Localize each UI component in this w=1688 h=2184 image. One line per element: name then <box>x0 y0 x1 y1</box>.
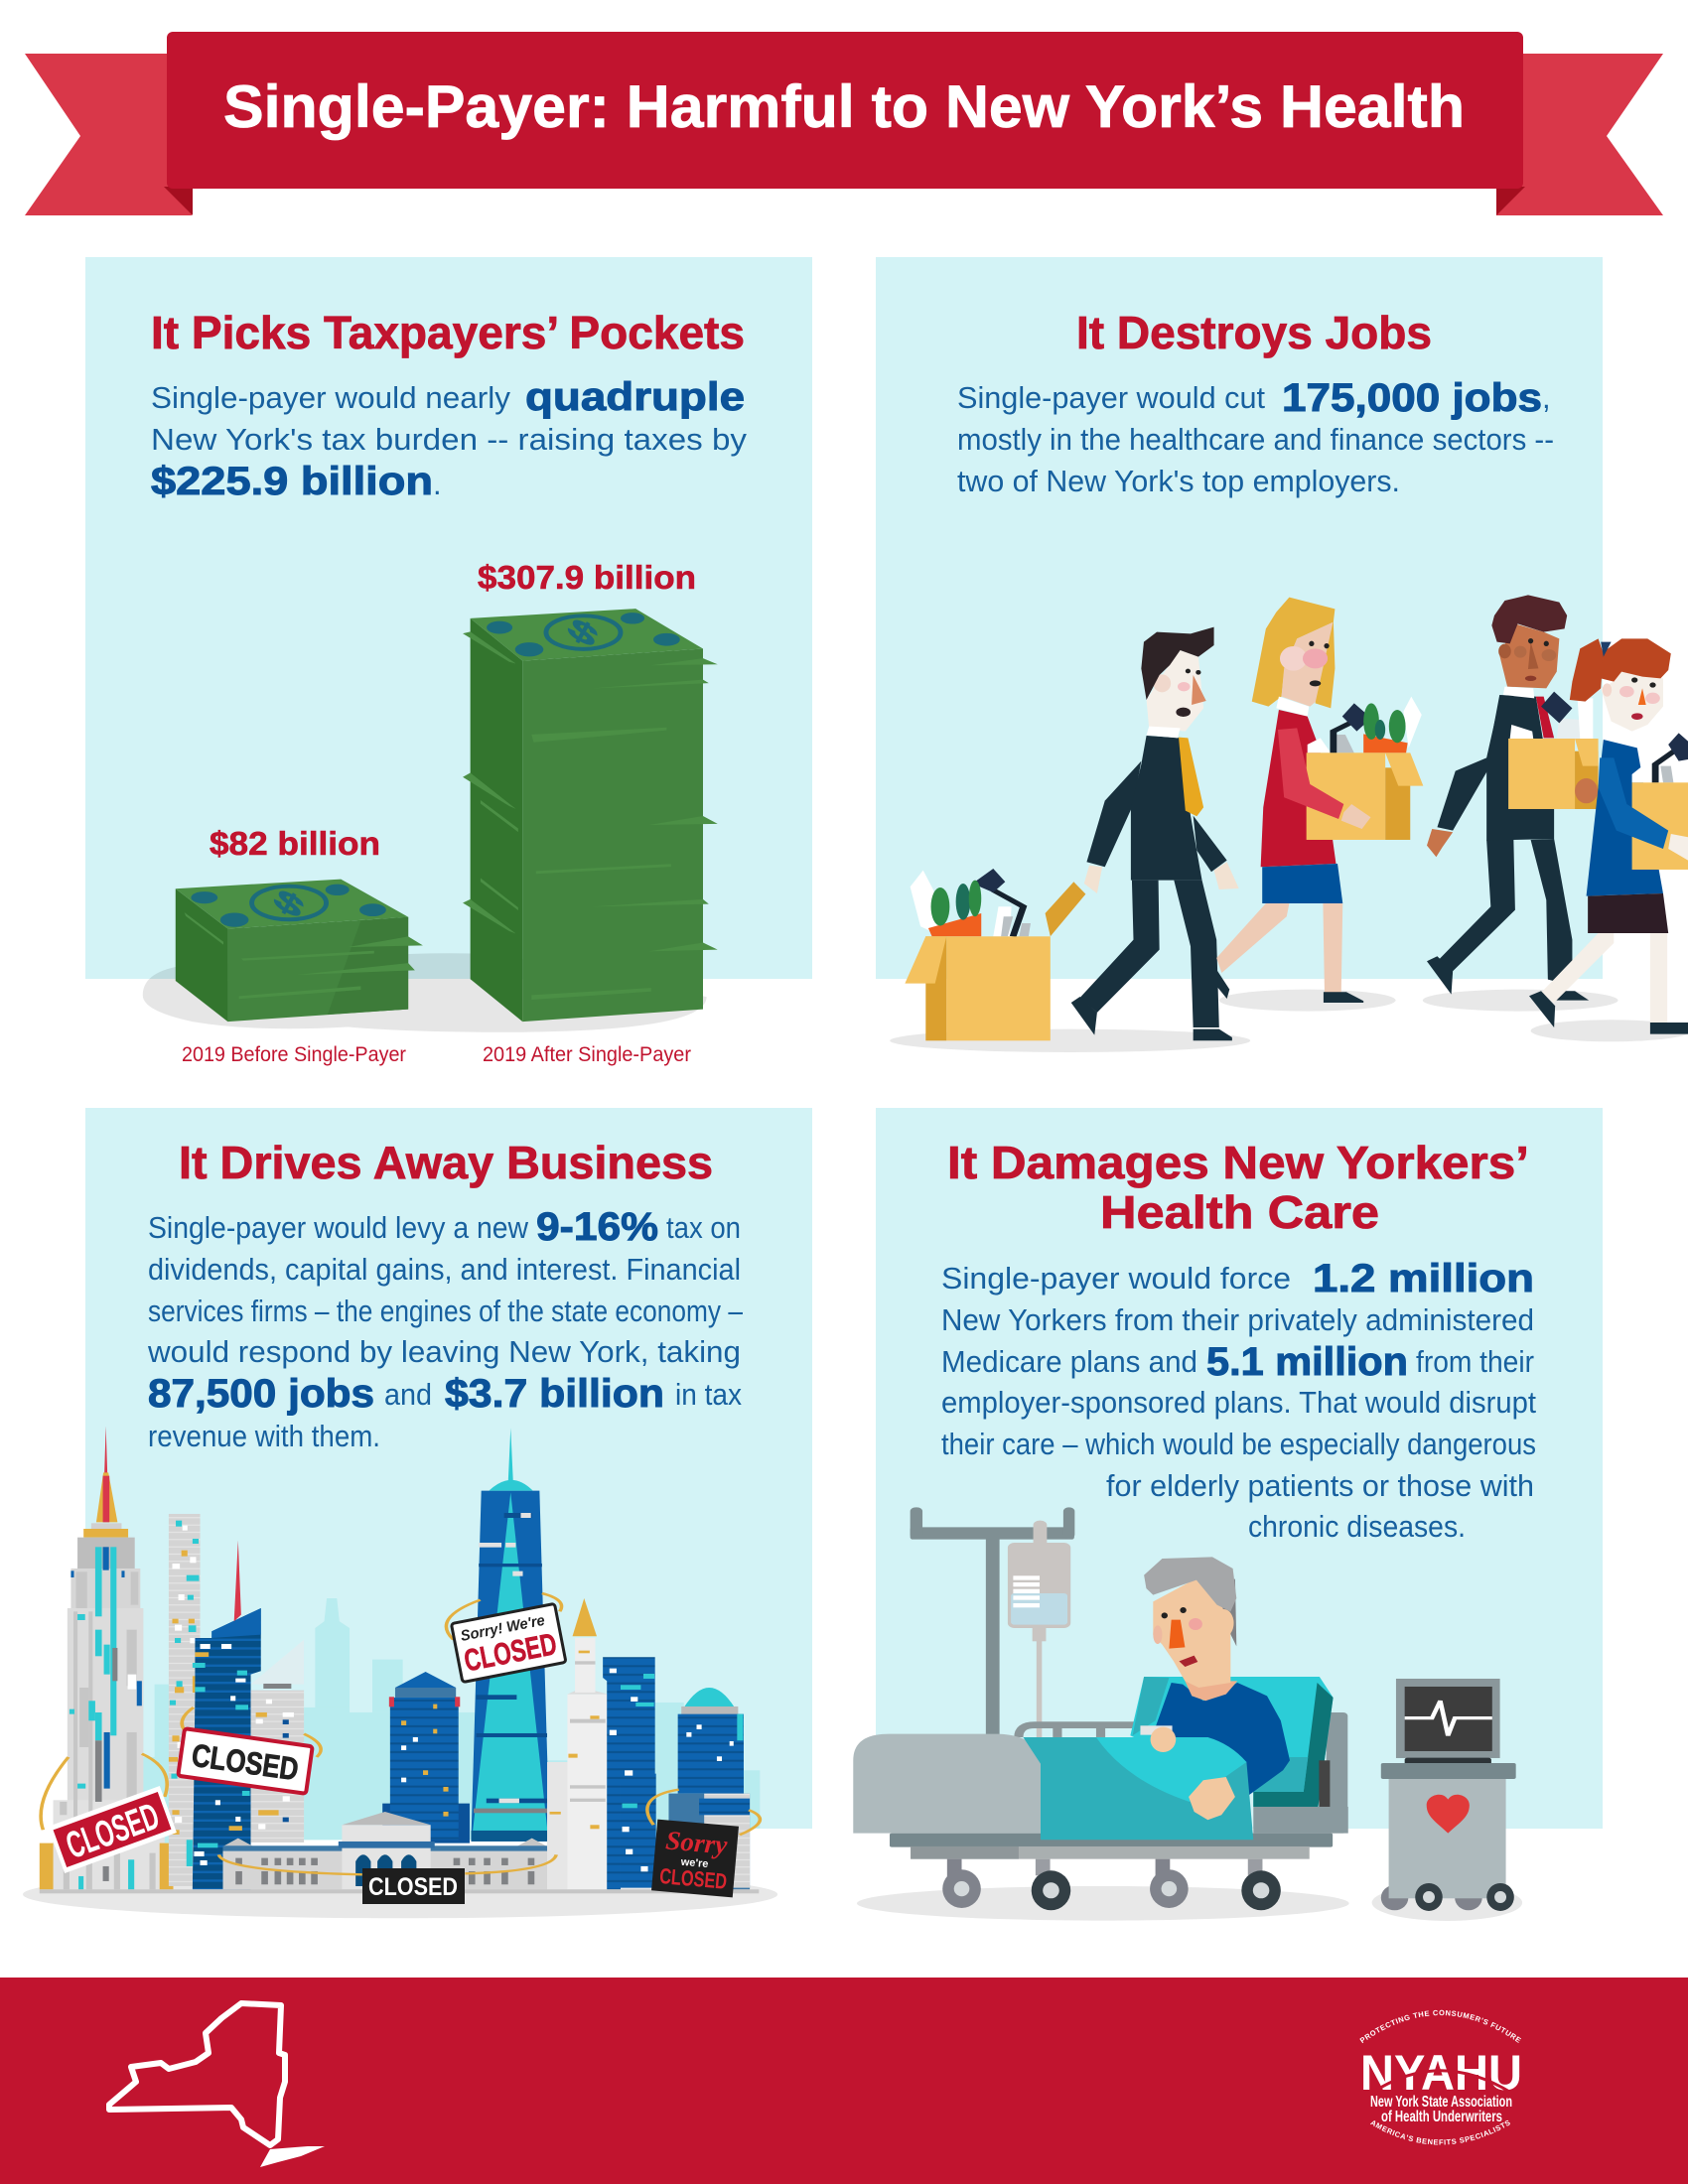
empire state building <box>40 1427 173 1889</box>
body text: chronic diseases. <box>1248 1509 1466 1544</box>
panel background <box>876 1108 1603 1829</box>
carried box <box>1508 692 1599 809</box>
heading: It Drives Away Business <box>179 1137 713 1188</box>
heading: It Destroys Jobs <box>1076 307 1432 358</box>
body text <box>147 1205 744 1453</box>
dark blue tower <box>193 1541 261 1889</box>
backrest pillow <box>1130 1677 1334 1808</box>
woman in blue <box>1529 638 1688 1034</box>
library building <box>222 1812 547 1889</box>
body text: New Yorkers from their privately administered <box>941 1302 1534 1337</box>
banner main ribbon <box>167 32 1523 189</box>
body text: Single-payer would cut <box>957 380 1265 415</box>
body text: employer-sponsored plans. That would disrupt <box>941 1385 1536 1420</box>
box on floor <box>905 869 1085 1040</box>
sign: white closed red border <box>178 1728 313 1794</box>
ground <box>23 1870 777 1918</box>
blue tower center <box>382 1672 470 1843</box>
sign: sorry black: we're <box>679 1856 709 1870</box>
body text: 87,500 jobs <box>148 1372 374 1416</box>
sign: red closed <box>48 1786 177 1873</box>
illustration: city skyline <box>23 1427 777 1918</box>
body text <box>941 1257 1536 1544</box>
NYAHU logo: NYAHU <box>1360 2045 1522 2101</box>
body text: . <box>433 467 442 501</box>
stack shadow <box>143 953 707 1032</box>
sign ropes <box>41 1593 760 1874</box>
sign: sorry black <box>651 1820 739 1897</box>
heading <box>947 1137 1529 1238</box>
sign: black closed <box>362 1868 465 1904</box>
dollar sign tall: $ <box>562 613 604 653</box>
NYAHU logo: New York State Association <box>1370 2094 1512 2111</box>
body text: 9-16% <box>536 1205 658 1249</box>
body text: from their <box>1416 1344 1534 1379</box>
sign: sorry black: Sorry <box>664 1825 730 1860</box>
background skyline <box>142 1598 760 1843</box>
heading: Health Care <box>1100 1186 1379 1238</box>
body text: in tax <box>675 1377 742 1412</box>
body text: $225.9 billion <box>151 460 433 503</box>
patient <box>1144 1557 1290 1802</box>
carried box <box>1307 697 1423 840</box>
body text: services firms – the engines of the state economy – <box>148 1294 744 1328</box>
grey tower <box>169 1514 201 1886</box>
body text: Medicare plans and <box>941 1344 1197 1379</box>
hands <box>1140 1725 1235 1820</box>
panel background <box>85 1108 812 1829</box>
title: Single-Payer: Harmful to New York’s Health <box>223 73 1465 140</box>
body text: would respond by leaving New York, taking <box>147 1334 741 1369</box>
body text: New York's tax burden -- raising taxes by <box>151 422 748 457</box>
footer band <box>0 1978 1688 2184</box>
value label 307.9: $307.9 billion <box>478 559 696 596</box>
NYAHU logo: of Health Underwriters <box>1381 2109 1502 2125</box>
body text: , <box>1542 380 1551 415</box>
panel: jobs <box>876 257 1688 1052</box>
sign: black closed: CLOSED <box>368 1873 458 1901</box>
panel: taxes <box>85 257 812 1066</box>
body text: Single-payer would force <box>941 1261 1291 1296</box>
body text: quadruple <box>525 375 745 419</box>
illustration: laid-off workers <box>890 595 1688 1052</box>
dollar sign small: $ <box>268 884 310 924</box>
sign: red closed: CLOSED <box>61 1796 165 1867</box>
floor shadows <box>857 1884 1522 1921</box>
woman in red <box>1216 598 1423 1003</box>
domed tower right <box>668 1688 750 1889</box>
bar chart: money stacks <box>143 559 718 1066</box>
iv pole <box>911 1507 1074 1737</box>
body text: for elderly patients or those with <box>1106 1468 1534 1503</box>
sign: sorry black: CLOSED <box>658 1863 728 1894</box>
body text: two of New York's top employers. <box>957 464 1400 498</box>
bed rail <box>1019 1725 1135 1737</box>
banner left tail <box>25 54 192 215</box>
axis label after: 2019 After Single-Payer <box>483 1043 691 1066</box>
panel: health care <box>853 1108 1603 1921</box>
body text <box>957 376 1554 498</box>
blue tower right <box>603 1657 656 1889</box>
body text: 175,000 jobs <box>1282 376 1542 420</box>
bed wheels <box>942 1859 1281 1910</box>
panel background <box>85 257 812 979</box>
iv bag <box>1008 1521 1070 1737</box>
blanket <box>1023 1737 1253 1840</box>
axis label before: 2019 Before Single-Payer <box>182 1043 406 1066</box>
man with yellow tie <box>1071 627 1239 1040</box>
body text: 1.2 million <box>1313 1257 1534 1300</box>
sign: white closed red border: CLOSED <box>190 1737 301 1787</box>
banner right tail <box>1496 54 1663 215</box>
tall money stack <box>463 609 718 1022</box>
panel: business <box>23 1108 812 1918</box>
ground line <box>40 1889 759 1893</box>
body text: mostly in the healthcare and finance sectors -- <box>957 422 1554 457</box>
title banner <box>25 32 1663 215</box>
body text: Single-payer would nearly <box>151 380 511 415</box>
freedom tower <box>471 1428 550 1842</box>
body text: revenue with them. <box>148 1419 380 1453</box>
body text: tax on <box>666 1210 741 1245</box>
heart monitor <box>1396 1679 1500 1766</box>
body text: their care – which would be especially dangerous <box>941 1427 1536 1461</box>
sign: sorry we're closed: Sorry! We're <box>459 1612 546 1645</box>
floor shadows <box>890 990 1688 1052</box>
ornate white tower <box>547 1598 621 1889</box>
new york state outline <box>109 2003 325 2167</box>
sign: sorry we're closed: CLOSED <box>462 1626 559 1678</box>
man with red tie <box>1427 595 1599 1001</box>
NYAHU logo: PROTECTING THE CONSUMER'S FUTURE <box>1359 2009 1521 2043</box>
body text: and <box>384 1377 432 1412</box>
heading: It Picks Taxpayers’ Pockets <box>151 307 745 358</box>
value label 82: $82 billion <box>210 825 380 862</box>
footboard <box>853 1734 1041 1834</box>
carried box <box>1632 733 1688 870</box>
NYAHU logo: AMERICA'S BENEFITS SPECIALISTS <box>1370 2120 1510 2144</box>
body text: 5.1 million <box>1206 1340 1408 1384</box>
body text: dividends, capital gains, and interest. Financial <box>148 1252 741 1287</box>
body text: Single-payer would levy a new <box>148 1210 529 1245</box>
white striped tower <box>251 1684 304 1843</box>
NYAHU logo <box>1359 2009 1522 2144</box>
sign: sorry we're closed <box>451 1603 566 1683</box>
body text <box>151 375 748 503</box>
heading: It Damages New Yorkers’ <box>947 1137 1529 1188</box>
body text: $3.7 billion <box>445 1372 664 1416</box>
panel background <box>876 257 1603 979</box>
illustration: hospital bed <box>853 1507 1522 1921</box>
bed frame <box>890 1807 1348 1859</box>
small money stack <box>176 880 423 1022</box>
headboard <box>1327 1712 1347 1834</box>
monitor cart <box>1381 1763 1516 1911</box>
